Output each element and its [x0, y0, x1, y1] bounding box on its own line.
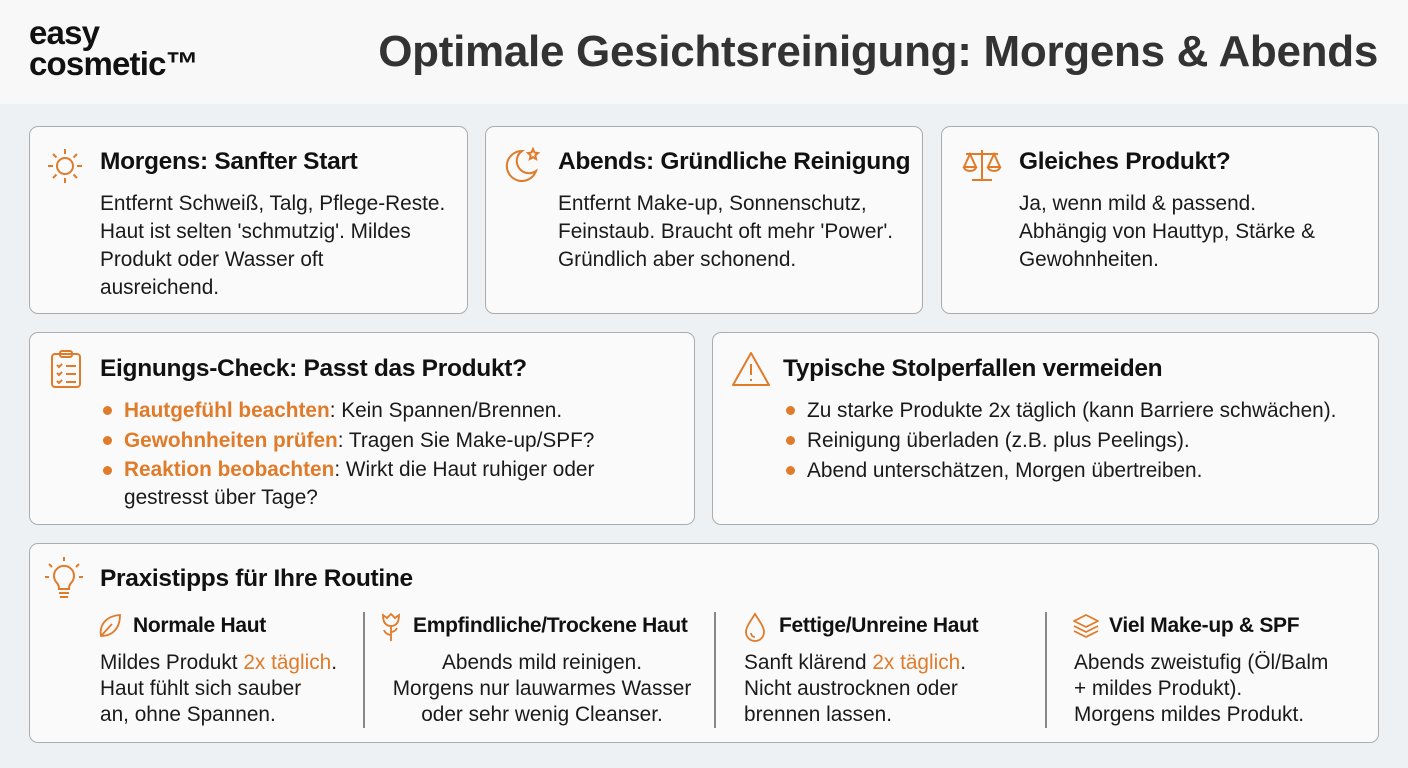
tip: sensitive: Abends mild reinigen.: [442, 651, 642, 674]
text: Ja, wenn mild & passend.: [1019, 192, 1256, 215]
heading: Morgens: Sanfter Start: [100, 148, 358, 175]
tip: normal: an, ohne Spannen.: [100, 703, 276, 726]
heading: Eignungs-Check: Passt das Produkt?: [100, 355, 527, 382]
panel: pitfalls: [712, 332, 1379, 525]
tip: sensitive: oder sehr wenig Cleanser.: [421, 703, 663, 726]
icon: scale: [962, 150, 1002, 181]
icon: sun: [48, 149, 82, 183]
list: Gewohnheiten prüfen: Tragen Sie Make-up/SPF?: [124, 429, 594, 452]
tip: makeup: [1073, 614, 1328, 726]
heading: Abends: Gründliche Reinigung: [558, 148, 910, 175]
logo: [29, 14, 198, 82]
tip: sensitive: Morgens nur lauwarmes Wasser: [393, 677, 691, 700]
text: [558, 192, 893, 271]
text: Abhängig von Hauttyp, Stärke &: [1019, 220, 1315, 243]
list: [786, 399, 1336, 482]
text: Gewohnheiten.: [1019, 248, 1159, 271]
text: ausreichend.: [100, 276, 219, 299]
list: Reaktion beobachten: Wirkt die Haut ruhiger oder gestresst über Tage?: [124, 458, 594, 509]
tip: normal: [100, 614, 337, 726]
panel: check: [29, 332, 695, 525]
logo: easy: [29, 14, 99, 51]
text: Feinstaub. Braucht oft mehr 'Power'.: [558, 220, 893, 243]
logo: cosmetic™: [29, 45, 198, 82]
tip: normal: Mildes Produkt 2x täglich.: [100, 651, 337, 674]
tip: oily: brennen lassen.: [744, 703, 892, 726]
panel: tips: [29, 543, 1379, 743]
list: [103, 399, 594, 509]
list: Abend unterschätzen, Morgen übertreiben.: [807, 459, 1202, 482]
panel: evening: [485, 126, 923, 314]
icon: bulb: [45, 557, 83, 598]
panel: same product: [941, 126, 1379, 314]
text: [1019, 192, 1315, 271]
icon: warning: [732, 352, 770, 386]
tip: makeup: + mildes Produkt).: [1074, 677, 1242, 700]
text: Produkt oder Wasser oft: [100, 248, 323, 271]
tip: sensitive: [382, 612, 691, 726]
tip: makeup: Viel Make-up & SPF: [1109, 614, 1299, 637]
list: Zu starke Produkte 2x täglich (kann Barriere schwächen).: [807, 399, 1336, 422]
tip: sensitive: Empfindliche/Trockene Haut: [413, 614, 688, 637]
icon: clipboard: [51, 350, 81, 388]
tip: oily: Sanft klärend 2x täglich.: [744, 651, 966, 674]
text: Haut ist selten 'schmutzig'. Mildes: [100, 220, 411, 243]
heading: Typische Stolperfallen vermeiden: [783, 355, 1162, 382]
tip: oily: Nicht austrocknen oder: [744, 677, 958, 700]
tip: oily: [744, 612, 978, 726]
tip: makeup: Morgens mildes Produkt.: [1074, 703, 1304, 726]
panel: morning: [29, 126, 468, 314]
list: Hautgefühl beachten: Kein Spannen/Brennen.: [124, 399, 562, 422]
text: [100, 192, 445, 299]
list: Reinigung überladen (z.B. plus Peelings).: [807, 429, 1190, 452]
tip: oily: Fettige/Unreine Haut: [779, 614, 978, 637]
heading: Praxistipps für Ihre Routine: [100, 565, 413, 592]
title: Optimale Gesichtsreinigung: Morgens & Abends: [378, 27, 1378, 76]
tip: normal: Normale Haut: [133, 614, 266, 637]
text: Entfernt Make-up, Sonnenschutz,: [558, 192, 867, 215]
tip: makeup: Abends zweistufig (Öl/Balm: [1074, 651, 1328, 674]
tip: normal: Haut fühlt sich sauber: [100, 677, 301, 700]
icon: moon: [506, 146, 540, 182]
header: [0, 0, 1408, 104]
text: Gründlich aber schonend.: [558, 248, 796, 271]
text: Entfernt Schweiß, Talg, Pflege-Reste.: [100, 192, 445, 215]
heading: Gleiches Produkt?: [1019, 148, 1230, 175]
